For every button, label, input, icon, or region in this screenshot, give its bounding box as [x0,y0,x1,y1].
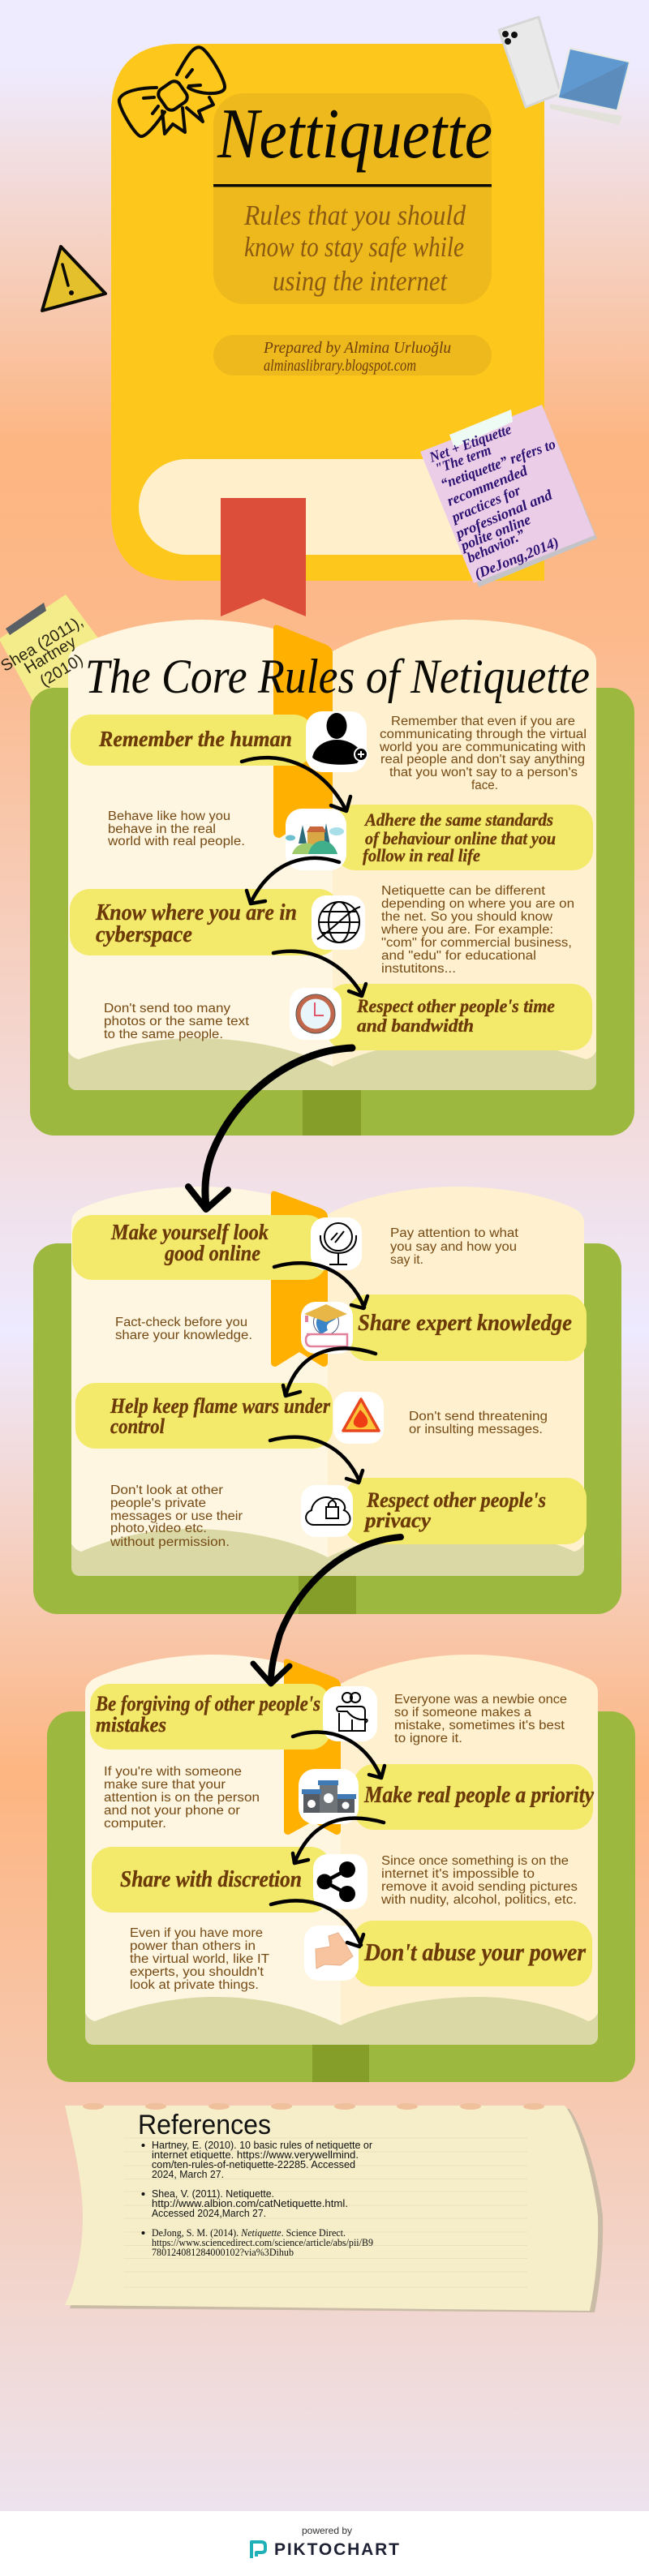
rule: privacy [345,1478,587,1544]
note text: Net + Etiquette [427,421,514,466]
subtitle: know to stay safe while [244,231,464,263]
subtitle: Rules that you should [243,200,466,231]
rule: privacy: privacy [363,1509,431,1532]
logo mark [251,2542,265,2558]
note text: "The term [433,441,493,477]
rule: forgiving: Be forgiving of other people's [95,1692,320,1715]
panel: cover book [111,44,544,616]
description: world you are communicating with [379,741,586,754]
description: Remember that even if you are [391,715,575,728]
title rule [213,184,492,187]
icon: warning triangle [42,247,105,311]
rule: real people [354,1764,595,1830]
rule: time and bandwidth [327,984,592,1050]
heading: The Core Rules of Netiquette [85,650,590,703]
icon: arm [304,1926,359,1981]
left page [85,1655,341,2025]
rule: know where you are: Know where you are in [95,900,297,925]
description [104,1765,260,1831]
description: Netiquette can be different [381,884,546,898]
description: Since once something is on the [381,1854,569,1868]
subtitle: using the internet [273,265,448,297]
subtitle [243,200,466,297]
reference list: 780124081284000102?via%3Dihub [152,2247,294,2258]
description: communicating through the virtual [380,728,587,741]
description: make sure that your [104,1778,226,1792]
panel: book one [30,620,634,1136]
rule: flame wars: Help keep flame wars under [110,1394,331,1418]
rule: look good online: Make yourself look [110,1220,269,1244]
description: photo,video etc. [110,1522,207,1535]
reference list: Accessed 2024,March 27. [152,2208,266,2219]
note text: professional and [452,486,555,542]
description: and "edu" for educational [381,949,536,963]
right page [328,1187,584,1557]
ribbon [271,1191,328,1367]
ribbon [273,625,333,838]
description: that you won't say to a person's [389,766,578,779]
description: Pay attention to what [390,1226,519,1240]
sticky source text: Shea (2011), [0,612,87,676]
reference list: Hartney, E. (2010). 10 basic rules of netiquette or [152,2140,372,2151]
page base [85,1995,598,2045]
icon: podium [299,1769,359,1824]
description: Everyone was a newbie once [394,1693,567,1707]
icon: mirror [311,1217,362,1270]
sticky note: net etiquette definition [420,405,597,587]
description: look at private things. [130,1978,259,1992]
page base [71,1525,584,1576]
sticky source text: (2010) [37,651,86,690]
author pill [213,335,492,376]
green cover [33,1243,621,1614]
note text: (DeJong,2014) [472,534,561,583]
description [130,1926,270,1992]
description: power than others in [130,1939,256,1953]
description: If you're with someone [104,1765,242,1779]
page base [68,1030,596,1090]
rule: same standards [335,805,593,870]
book cover [111,44,544,581]
description: "com" for commercial business, [381,936,572,950]
sticky source text: Hartney [21,633,80,677]
title: Nettiquette [217,95,492,174]
icon: graduation and book [301,1302,353,1354]
tape [449,410,513,448]
icon: globe [312,895,365,950]
rule: look good online: good online [164,1241,260,1265]
description [390,1226,519,1267]
description: Don't send too many [104,1002,230,1015]
description [394,1693,567,1745]
description: photos or the same text [104,1015,250,1028]
reference list [141,2140,373,2258]
book page edge [139,459,519,555]
description [379,715,587,792]
description [110,1483,243,1549]
tape [6,603,46,635]
arrow: book one to book two [188,1048,352,1209]
icon: person [306,711,368,772]
rule: remember the human: Remember the human [98,727,292,751]
spine [312,2045,369,2082]
note text: “netiquette” refers to [439,436,557,492]
description: and not your phone or [104,1804,240,1818]
reference list: http://www.albion.com/catNetiquette.html. [152,2198,348,2209]
description: where you are. For example: [380,923,553,937]
description [409,1410,548,1436]
description: share your knowledge. [115,1329,252,1342]
description: Fact-check before you [115,1316,247,1329]
description: depending on where you are on [381,897,574,911]
rule: discretion [92,1847,331,1913]
rule: know where you are: cyberspace [96,922,192,947]
rule: power [353,1921,592,1986]
description: or insulting messages. [409,1423,543,1436]
author text [263,339,451,375]
note text: polite online [457,511,533,554]
description [107,809,245,848]
reference list: 2024, March 27. [152,2169,224,2180]
rule: share expert knowledge: Share expert knowledge [358,1311,572,1336]
left page [71,1187,328,1557]
ribbon [284,1659,341,1835]
description [380,884,574,976]
description: attention is on the person [104,1791,260,1805]
reference list: Shea, V. (2011). Netiquette. [152,2188,274,2200]
description: so if someone makes a [394,1706,531,1719]
description: experts, you shouldn't [130,1965,264,1979]
logo wordmark: PIKTOCHART [274,2540,399,2559]
description: mistake, sometimes it's best [394,1719,565,1732]
red bookmark [221,498,306,616]
rule: forgiving [90,1684,331,1750]
rule: share expert knowledge [347,1294,587,1361]
description: Don't send threatening [409,1410,548,1423]
title panel [213,93,492,304]
rule: discretion: Share with discretion [120,1866,302,1892]
description: real people and don't say anything [380,753,585,766]
rule: same standards: Adhere the same standards [363,809,553,830]
green cover [47,1711,635,2082]
panel: references paper [65,2103,603,2312]
rule: power: Don't abuse your power [363,1938,587,1966]
description: instutitons... [381,962,456,976]
rule: look good online [72,1215,327,1280]
paper shadow [67,2109,603,2312]
spine [303,1090,361,1136]
note text [427,421,561,583]
description: computer. [104,1817,166,1831]
description: behave in the real [108,822,216,836]
binding holes [83,2103,544,2110]
rule: same standards: follow in real life [363,845,480,865]
rule: same standards: of behaviour online that you [365,828,556,848]
note text: recommended [445,462,531,509]
note text: behavior.” [464,526,527,566]
description: people's private [110,1496,206,1510]
panel: book two [33,1187,621,1614]
sticky note: sources [0,595,101,730]
reference list: https://www.sciencedirect.com/science/article/abs/pii/B9 [152,2237,373,2248]
description: Don't look at other [110,1483,223,1497]
reference list: DeJong, S. M. (2014). Netiquette. Science Direct. [152,2227,346,2239]
paper [65,2106,598,2311]
rule: forgiving: mistakes [96,1713,166,1737]
arrows within book three [271,1732,385,1947]
left page [68,620,333,1067]
icon: bow [119,47,225,136]
author text: Prepared by Almina Urluoğlu [263,339,451,357]
rule: remember the human [71,715,314,766]
reference list: internet etiquette. https://www.verywellmind. [152,2149,359,2161]
footer [0,2511,649,2576]
arrows within book one [242,758,366,996]
panel: book three [47,1655,635,2082]
icon: fire warning [333,1392,384,1444]
powered by label: powered by [302,2525,352,2536]
references heading: References [138,2110,271,2140]
rule: real people: Make real people a priority [363,1783,595,1808]
description [115,1316,252,1342]
description: the net. So you should know [381,910,553,924]
icon: laptop [550,47,630,125]
description: you say and how you [390,1240,517,1254]
icon: clock [290,988,342,1040]
description: to ignore it. [394,1732,462,1745]
icon: share [313,1854,367,1909]
arrows within book two [270,1263,376,1483]
author text: alminaslibrary.blogspot.com [264,357,416,375]
description: messages or use their [110,1509,243,1523]
reference list: com/ten-rules-of-netiquette-22285. Accessed [152,2159,355,2170]
description: with nudity, alcohol, politics, etc. [380,1893,577,1907]
description: Even if you have more [130,1926,263,1940]
icon: village [286,809,346,870]
description: the virtual world, like IT [130,1952,270,1966]
description: say it. [390,1253,423,1267]
description: remove it avoid sending pictures [381,1880,578,1894]
right page [341,1655,598,2025]
spine [299,1576,356,1614]
description: without permission. [110,1535,230,1549]
icon: phone [499,17,561,107]
description [380,1854,578,1907]
right page [333,620,596,1067]
description: to the same people. [104,1028,223,1041]
icon: cloud lock [301,1485,353,1537]
description: world with real people. [107,835,245,848]
icon: people hugging [323,1686,377,1741]
rule: time and bandwidth: and bandwidth [357,1015,474,1036]
description [104,1002,250,1041]
description: Behave like how you [108,809,230,823]
rule: flame wars: control [110,1415,165,1438]
rule: know where you are [70,889,339,955]
rule: time and bandwidth: Respect other people's time [356,996,555,1016]
green cover [30,688,634,1136]
note text: practices for [448,482,523,526]
rule: privacy: Respect other people's [366,1488,546,1512]
rule: flame wars [75,1383,333,1449]
arrow: book two to book three [253,1537,401,1684]
description: internet it's impossible to [381,1867,535,1881]
description: face. [471,779,498,792]
